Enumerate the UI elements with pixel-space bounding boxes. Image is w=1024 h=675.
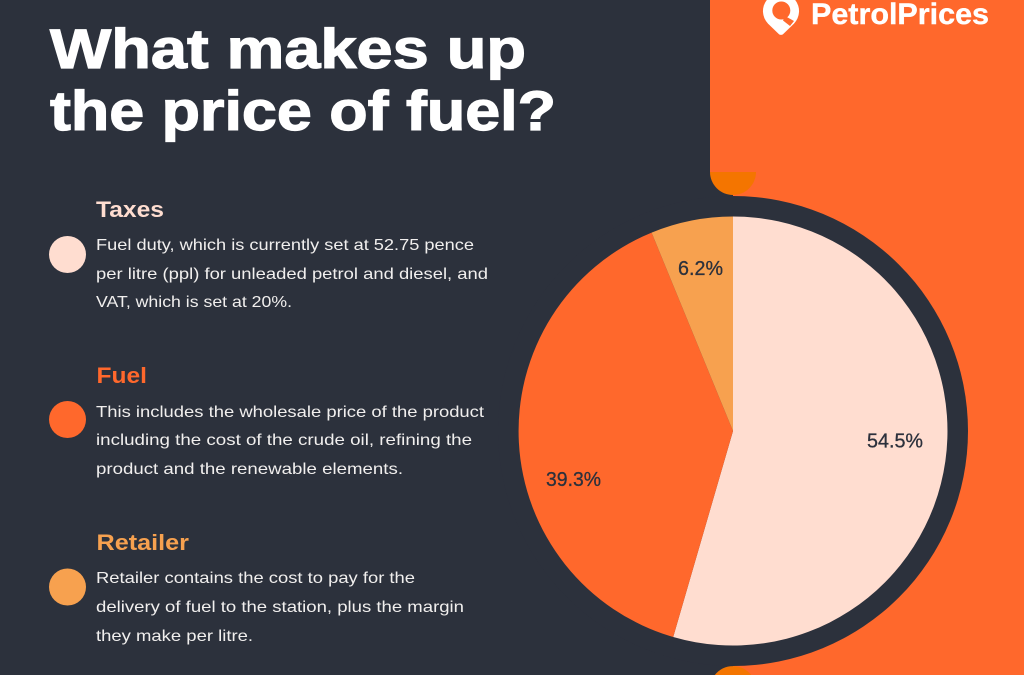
legend heading: Taxes: Taxes <box>96 197 164 222</box>
value label: 39.3%: 39.3% <box>546 468 601 491</box>
value label: 54.5%: 54.5% <box>867 430 923 452</box>
legend swatch: Taxes <box>49 236 86 273</box>
pie chart <box>519 216 947 646</box>
slice: Retailer 6.2% <box>652 216 733 431</box>
description: Fuel: product and the renewable elements. <box>96 461 403 478</box>
description: Fuel <box>96 404 485 478</box>
legend heading: Fuel: Fuel <box>96 363 147 388</box>
description: Taxes <box>96 237 488 311</box>
legend swatch: Retailer <box>49 568 86 606</box>
orange background panel <box>710 0 1024 675</box>
title: the price of fuel? <box>50 79 556 142</box>
bottom notch accent <box>715 666 751 675</box>
legend swatch: Fuel <box>49 401 86 438</box>
logo: PetrolPrices <box>763 0 989 35</box>
slice: Fuel 39.3% <box>519 233 733 637</box>
description: Taxes: per litre (ppl) for unleaded petrol and diesel, and <box>96 266 488 283</box>
dark ring around pie <box>498 196 968 666</box>
description: Fuel: This includes the wholesale price of the product <box>96 404 485 421</box>
title: What makes up <box>50 17 526 80</box>
description: Retailer: Retailer contains the cost to pay for the <box>96 570 415 587</box>
description: Retailer: they make per litre. <box>96 628 253 645</box>
description: Taxes: VAT, which is set at 20%. <box>96 294 292 311</box>
legend item: Retailer <box>49 530 464 645</box>
value label: 6.2%: 6.2% <box>678 257 723 280</box>
description: Fuel: including the cost of the crude oil, refining the <box>96 432 472 449</box>
description: Taxes: Fuel duty, which is currently set at 52.75 pence <box>96 237 474 254</box>
description: Retailer <box>96 570 464 645</box>
icon: location pin <box>763 0 799 35</box>
description: Retailer: delivery of fuel to the station, plus the margin <box>96 599 464 616</box>
legend item: Fuel <box>49 363 485 478</box>
title <box>50 17 556 142</box>
legend item: Taxes <box>49 197 488 311</box>
top notch accent <box>710 172 756 195</box>
legend heading: Retailer: Retailer <box>96 530 189 555</box>
slice: Taxes 54.5% <box>673 216 947 646</box>
